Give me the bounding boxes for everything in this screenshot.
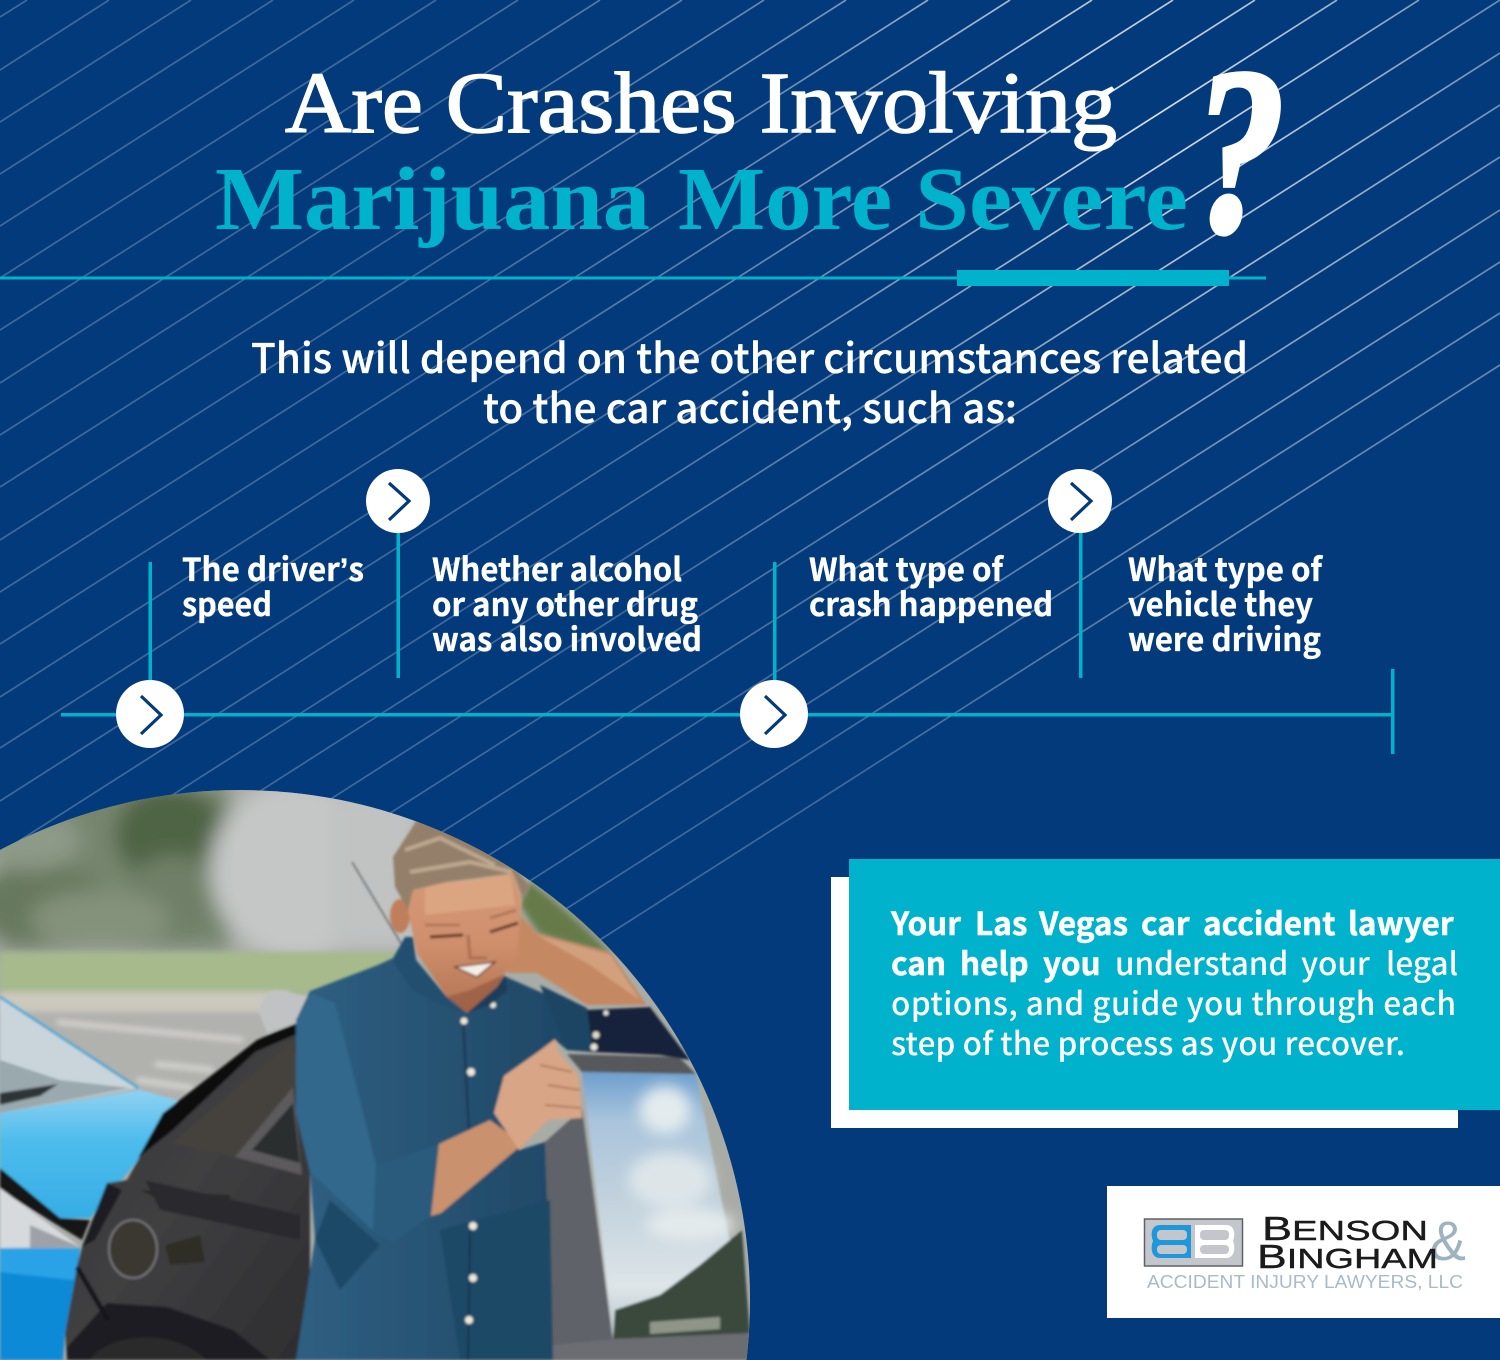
item: vehicle type: were driving [1128,615,1321,661]
item: speed: The driver’s [182,545,364,591]
marker 4 [1048,469,1112,533]
hand [494,1039,582,1150]
forearm [431,1120,523,1216]
callout text: lawyer [1348,899,1454,945]
item: alcohol or drugs: was also involved [432,615,702,661]
photo: injured driver beside crashed cars [0,780,750,1360]
blurred scenery [0,780,615,960]
title [215,19,1301,283]
marker 1 [116,680,184,748]
logo name: B INGHAM [1257,1238,1438,1275]
collar [393,937,467,1013]
callout text: legal [1386,939,1458,985]
blue car [0,998,136,1102]
logo mark [1144,1219,1242,1266]
raised arm [507,913,647,1005]
sleeve [293,995,376,1230]
callout text: your [1301,939,1370,985]
item: speed [182,545,364,626]
callout text: Your [890,899,961,945]
callout text: step of the process as you recover. [891,1019,1405,1065]
title line 1: Are Crashes Involving [285,54,1117,151]
logo [1107,1186,1500,1318]
callout panel [849,859,1500,1110]
callout text [890,899,1458,1065]
logo tagline: ACCIDENT INJURY LAWYERS, LLC [1147,1272,1463,1292]
hair [393,820,530,910]
item: crash type [809,545,1053,626]
callout text: understand [1115,939,1288,985]
title line 2 [215,150,1188,249]
marker 3 [740,680,808,748]
marker 2 [366,469,430,533]
callout text: can [891,939,946,985]
callout text: options, and guide you through each [891,979,1456,1025]
title line 2: Marijuana [215,150,650,249]
callout text: Las [975,899,1027,945]
item: crash type: crash happened [809,580,1053,626]
timeline axis [61,530,1394,754]
item: vehicle type: vehicle they [1128,580,1313,626]
callout text: you [1043,939,1101,985]
callout shadow panel [831,877,1458,1128]
item: vehicle type [1128,545,1323,661]
door frame [567,1054,696,1074]
shirt torso [296,937,579,1360]
timeline [61,469,1394,754]
title line 2: More [678,150,892,249]
callout [831,859,1500,1128]
subheading: to the car accident, such as: [483,375,1017,435]
shirt buttons [458,1000,498,1326]
item: crash type: What type of [809,545,1004,591]
logo ampersand: & [1430,1209,1466,1272]
question mark: ? [1179,19,1301,283]
callout text: Vegas [1038,899,1128,945]
title line 2: Severe [915,150,1188,249]
logo name: B ENSON [1262,1210,1428,1247]
item: alcohol or drugs [432,545,702,661]
subheading [251,325,1248,435]
callout text: accident [1203,899,1336,945]
callout text: car [1141,899,1190,945]
header rule [0,270,1266,286]
item: speed: speed [182,580,272,626]
item: alcohol or drugs: or any other drug [432,580,698,626]
ear [390,899,410,933]
subheading: This will depend on the other circumstances related [251,325,1248,385]
item: vehicle type: What type of [1128,545,1323,591]
dark car [258,990,313,1033]
door window [582,1072,750,1340]
rolled dark sleeve [567,1007,690,1060]
logo name [1257,1210,1438,1275]
logo panel [1107,1186,1500,1318]
callout text: help [960,939,1029,985]
item: alcohol or drugs: Whether alcohol [432,545,682,591]
face [408,873,522,1013]
